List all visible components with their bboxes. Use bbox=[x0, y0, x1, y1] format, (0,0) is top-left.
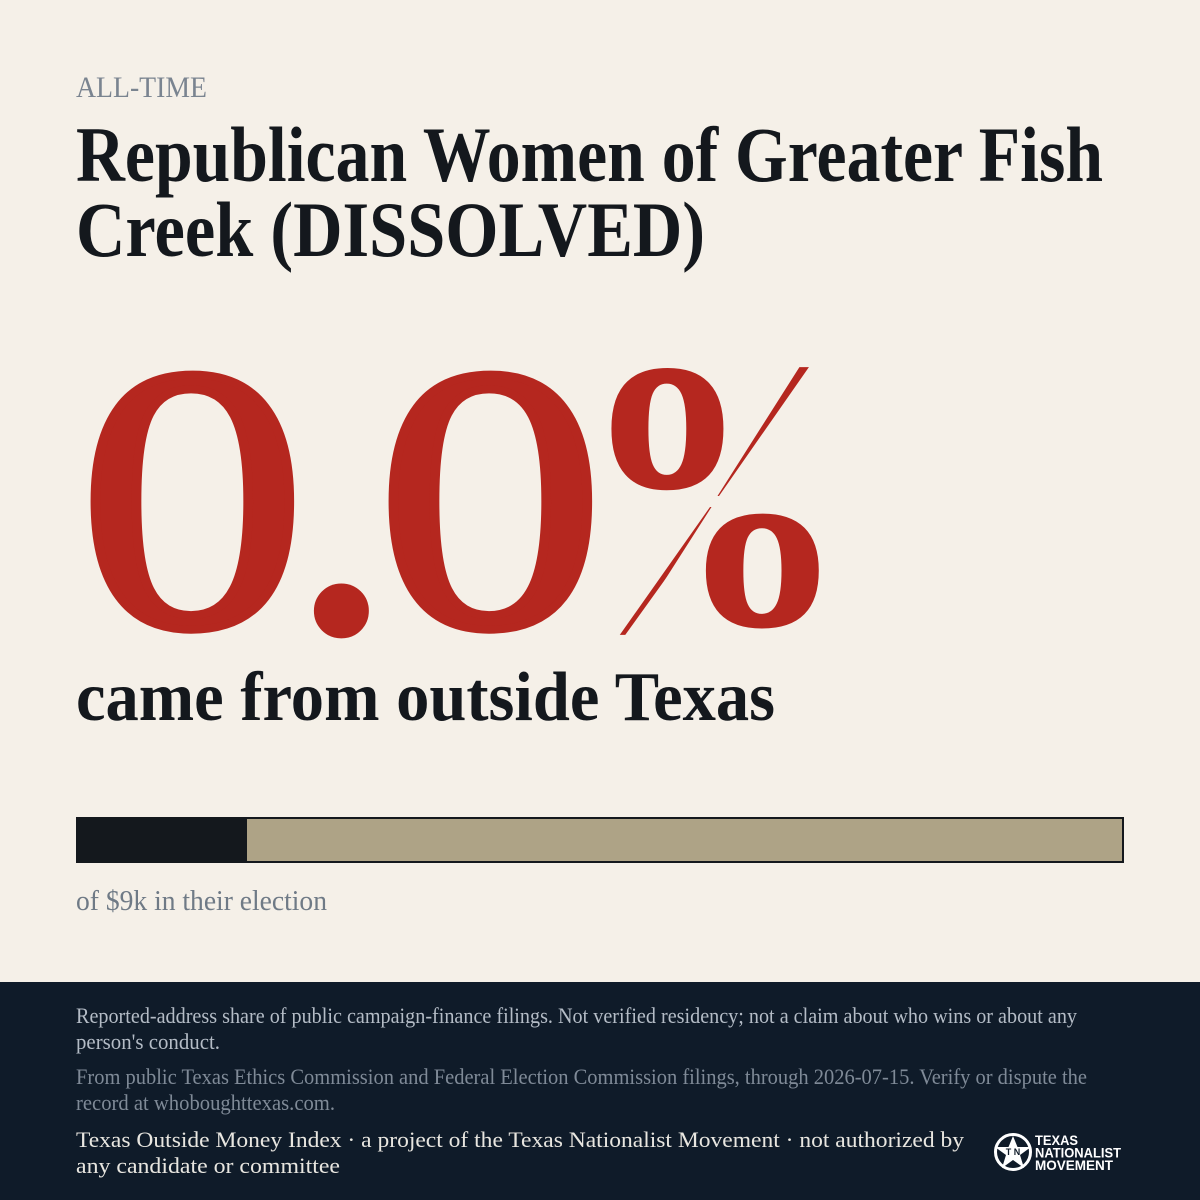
source text bbox=[76, 1064, 1087, 1115]
big percentage: 0 bbox=[78, 289, 307, 708]
disclaimer text: person's conduct. bbox=[76, 1029, 220, 1054]
logo wordmark: MOVEMENT bbox=[1035, 1158, 1114, 1173]
bar caption: of $9k in their election bbox=[76, 885, 327, 917]
disclaimer text bbox=[76, 1003, 1077, 1054]
footer panel bbox=[0, 982, 1200, 1200]
big percentage: 0 bbox=[376, 289, 605, 708]
title: Creek (DISSOLVED) bbox=[76, 186, 705, 273]
subheading: came from outside Texas bbox=[76, 659, 775, 736]
logo wordmark bbox=[1035, 1133, 1122, 1173]
big percentage bbox=[90, 367, 819, 638]
logo wordmark: TEXAS bbox=[1035, 1133, 1078, 1148]
disclaimer text: Reported-address share of public campaign-finance filings. Not verified residency; not a claim about who wins or about any bbox=[76, 1003, 1077, 1028]
big percentage: % bbox=[575, 291, 928, 667]
source text: record at whoboughttexas.com. bbox=[76, 1090, 335, 1115]
attribution text bbox=[76, 1127, 964, 1178]
big percentage: . bbox=[299, 333, 384, 708]
logo wordmark: NATIONALIST bbox=[1035, 1146, 1122, 1160]
eyebrow: all-time: ALL-TIME bbox=[76, 71, 207, 104]
progress bar bbox=[76, 817, 1124, 863]
big percentage: % bbox=[497, 341, 852, 693]
logo: Texas Nationalist Movement bbox=[995, 1133, 1122, 1173]
title bbox=[76, 111, 1103, 273]
icon: star in circle: T N bbox=[1006, 1147, 1020, 1157]
attribution text: Texas Outside Money Index · a project of the Texas Nationalist Movement · not authorized by bbox=[76, 1127, 964, 1152]
attribution text: any candidate or committee bbox=[76, 1153, 340, 1178]
source text: From public Texas Ethics Commission and Federal Election Commission filings, through 2026-07-15. Verify or dispute the bbox=[76, 1064, 1087, 1089]
big percentage: % bbox=[536, 277, 882, 717]
